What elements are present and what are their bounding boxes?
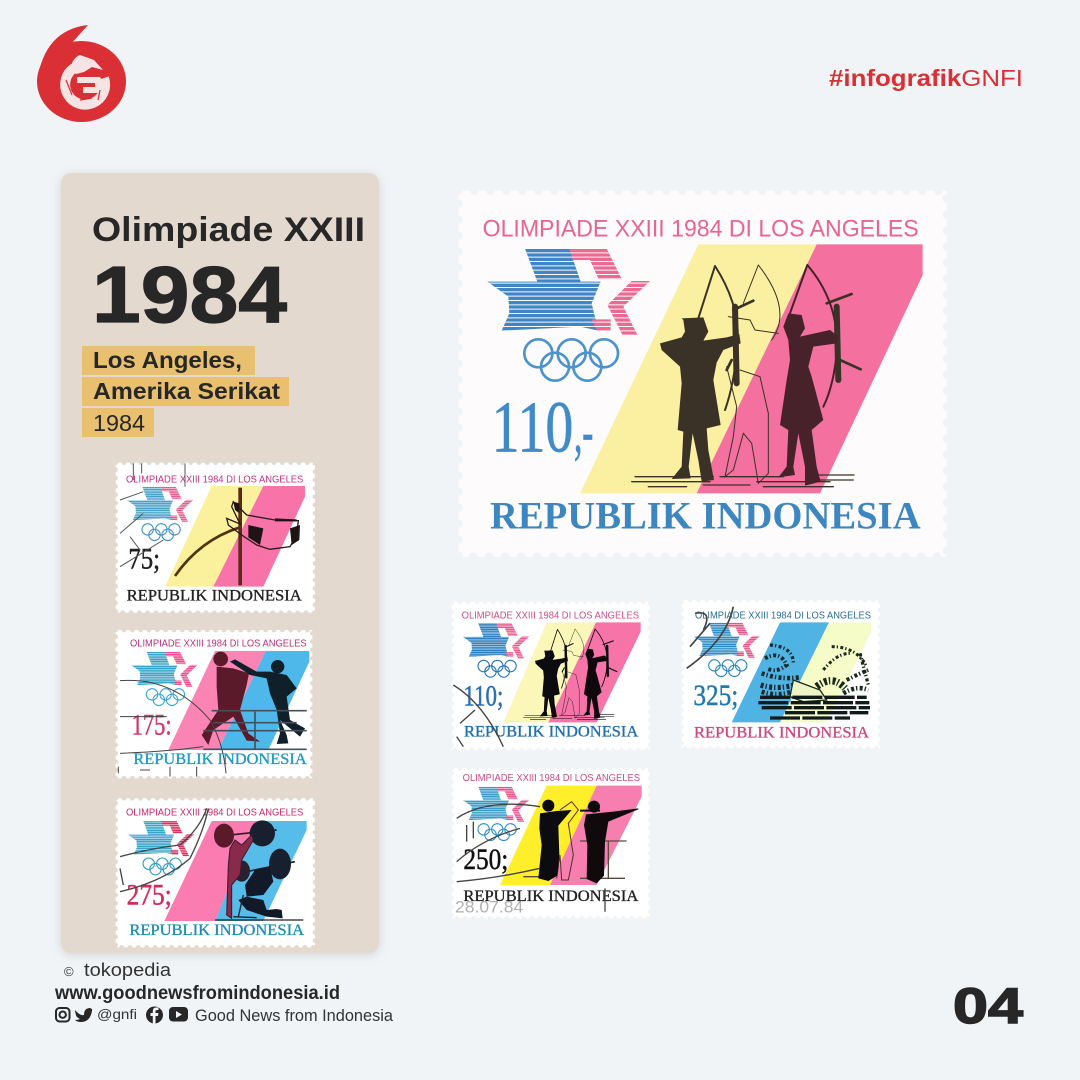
stamp: boxing 175: REPUBLIK INDONESIA: [133, 751, 307, 768]
social icons and handles: [56, 1006, 394, 1025]
stamp: pole vault 75: [116, 463, 315, 613]
icon: twitter: [75, 1008, 92, 1022]
stamp: shooting 250: 28.07.84: [455, 897, 523, 916]
hashtag: #infografik GNFI: [829, 65, 1023, 91]
icon: youtube: [169, 1007, 188, 1022]
location highlight: Amerika Serikat: Amerika Serikat: [93, 378, 280, 404]
year heading: 1984: [92, 250, 288, 339]
stamp value: 110: [492, 387, 573, 468]
stamp: small archery 110: REPUBLIK INDONESIA: [464, 724, 639, 741]
stamp: swimming 325: OLIMPIADE XXIII 1984 DI LOS ANGELES: [695, 610, 871, 621]
stamp: swimming 325: REPUBLIK INDONESIA: [694, 724, 869, 741]
facebook and youtube name: Good News from Indonesia: [195, 1006, 394, 1025]
stamp: pole vault 75: REPUBLIK INDONESIA: [127, 588, 302, 605]
panel title: Olimpiade XXIII: [92, 211, 365, 249]
handle: @gnfi: [97, 1006, 137, 1022]
stamp: boxing 175: 175:: [132, 709, 172, 741]
stamp value: ,-: [574, 399, 593, 465]
stamp: weightlifting 275: OLIMPIADE XXIII 1984 DI LOS ANGELES: [126, 808, 304, 819]
stamp: weightlifting 275: 275;: [127, 879, 172, 911]
stamp: weightlifting 275: [116, 798, 315, 947]
icon: facebook: [146, 1006, 163, 1024]
stamp: shooting 250: REPUBLIK INDONESIA: [463, 888, 639, 905]
year highlight: [82, 408, 154, 437]
stamp: swimming 325: 325;: [693, 680, 738, 712]
photo credit: ©: [64, 964, 74, 979]
stamp: shooting 250: [452, 768, 650, 918]
icon: instagram: [56, 1008, 70, 1022]
location highlight: Los Angeles: Los Angeles,: [93, 347, 242, 373]
stamp: small archery 110: OLIMPIADE XXIII 1984 DI LOS ANGELES: [462, 610, 639, 621]
stamp: large archery 110: OLIMPIADE XXIII 1984 DI LOS ANGELES: [483, 217, 919, 243]
photo credit: tokopedia: [84, 960, 172, 980]
stamp: pole vault 75: 75;: [128, 543, 160, 575]
stamp: boxing 175: [116, 630, 312, 778]
stamp: shooting 250: 250;: [463, 844, 508, 876]
logo emblem: [65, 55, 105, 105]
stamp: small archery 110: 110;: [463, 681, 503, 713]
stamp: boxing 175: OLIMPIADE XXIII 1984 DI LOS ANGELES: [130, 639, 307, 650]
left info panel: [61, 173, 379, 953]
GNFI logo: [37, 25, 126, 122]
year highlight: 1984: [93, 410, 145, 436]
stamp: shooting 250: OLIMPIADE XXIII 1984 DI LOS ANGELES: [463, 773, 640, 784]
stamp: large archery 110: [458, 191, 947, 557]
website url: www.goodnewsfromindonesia.id: [54, 983, 340, 1004]
page number: 04: [953, 978, 1023, 1034]
swimmer splash: right: [817, 647, 868, 693]
swimmer splash: left: [761, 645, 800, 694]
stamp: swimming 325: [682, 600, 880, 748]
stamp: weightlifting 275: REPUBLIK INDONESIA: [129, 922, 304, 939]
stamp: large archery 110: REPUBLIK INDONESIA: [490, 493, 921, 537]
stamp: small archery 110: [452, 602, 650, 750]
stamp: pole vault 75: OLIMPIADE XXIII 1984 DI LOS ANGELES: [126, 474, 304, 485]
